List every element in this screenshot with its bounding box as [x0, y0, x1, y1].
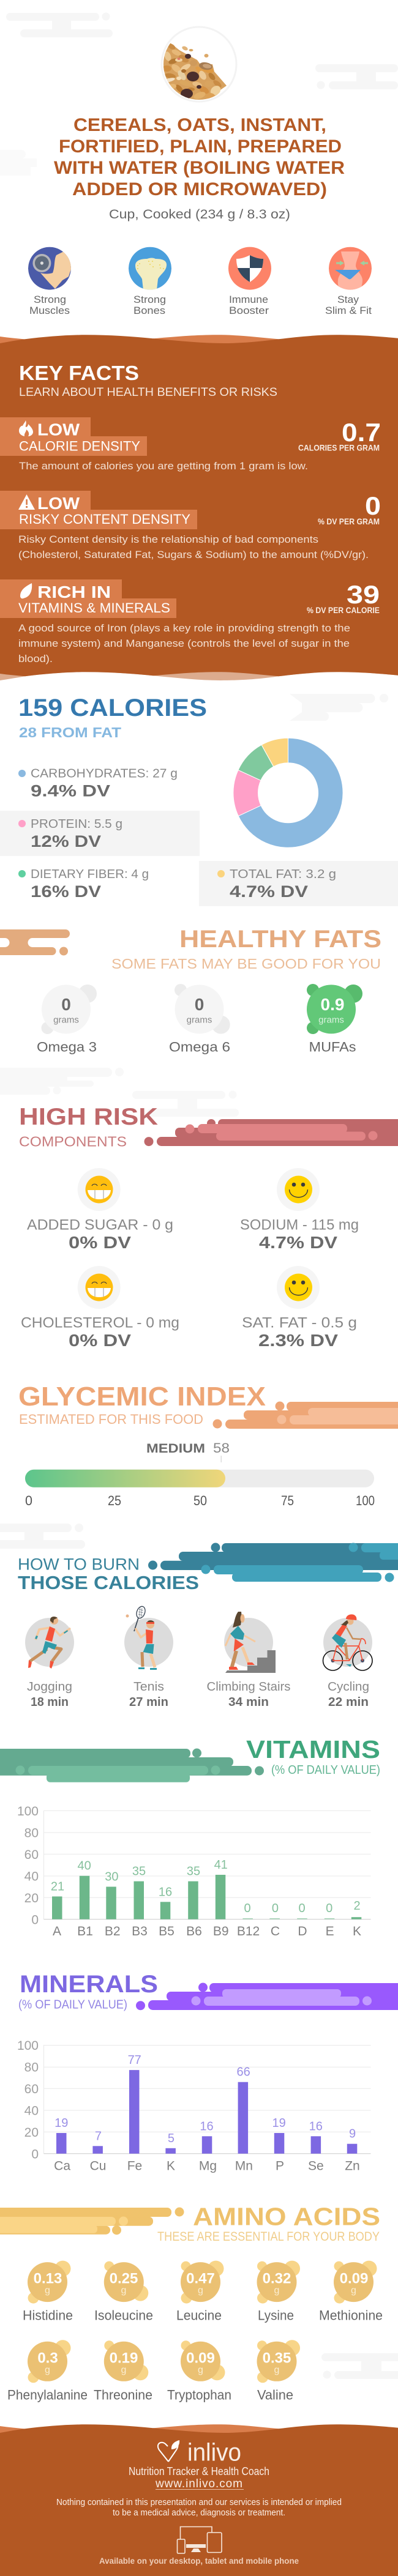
amino: isoleucine: Isoleucine	[94, 2308, 153, 2323]
title: ADDED OR MICROWAVED)	[72, 179, 327, 199]
label: jogging: Jogging	[27, 1680, 72, 1694]
title: WITH WATER (BOILING WATER	[54, 158, 345, 178]
bar chart: vitamins: D	[298, 1924, 307, 1938]
decoration: mineral bars	[136, 1982, 398, 2010]
amino: tryptophan: g	[198, 2365, 203, 2375]
item: added sugar: 0% DV	[69, 1233, 131, 1252]
amino: histidine: g	[45, 2285, 50, 2296]
bar chart: vitamins: A	[53, 1924, 61, 1938]
label: tennis: 27 min	[129, 1696, 168, 1709]
label: strong muscles	[29, 294, 70, 316]
bar chart: vitamins: 0	[298, 1902, 306, 1915]
bar chart: minerals: Fe	[127, 2159, 142, 2173]
panel: glycemic index	[18, 1382, 398, 1508]
item: added sugar: ADDED SUGAR - 0 g	[27, 1216, 173, 1234]
fact: rich in vitamins and minerals: % DV PER CALORIE	[307, 605, 380, 615]
decoration: high risk bars	[145, 1119, 398, 1146]
bar chart: vitamins: 2	[353, 1899, 361, 1913]
bar chart: minerals: Mn	[235, 2159, 253, 2173]
logo: inlivo	[187, 2438, 241, 2466]
bar chart: minerals: 80	[24, 2061, 39, 2074]
amino: threonine: Threonine	[94, 2388, 152, 2403]
raisins	[181, 54, 201, 99]
label: tennis	[129, 1680, 168, 1709]
legend: carbohydrates: CARBOHYDRATES: 27 g	[31, 767, 178, 781]
disclaimer	[56, 2497, 342, 2518]
mufas	[307, 984, 362, 1055]
bar chart: vitamins: 0	[272, 1902, 279, 1915]
amino: histidine: Histidine	[23, 2308, 73, 2323]
item: saturated fat: SAT. FAT - 0.5 g	[242, 1314, 357, 1331]
amino: phenylalanine: 0.3	[37, 2350, 58, 2367]
gauge value	[146, 1440, 230, 1462]
donut chart	[233, 738, 343, 847]
legend: protein: PROTEIN: 5.5 g	[31, 817, 122, 831]
activity: climbing stairs	[224, 1612, 276, 1673]
decoration: glycemic bars	[213, 1401, 398, 1429]
legend: carbohydrates: 9.4% DV	[31, 782, 110, 800]
gauge bar	[25, 1470, 374, 1487]
heading: key facts: LEARN ABOUT HEALTH BENEFITS OR RISKS	[19, 386, 277, 399]
serving size: Cup, Cooked (234 g / 8.3 oz)	[109, 207, 290, 221]
bar chart: vitamins: B1	[77, 1924, 93, 1938]
bar chart: minerals: K	[167, 2159, 175, 2173]
label: cycling	[328, 1680, 369, 1709]
legend: dietary fiber	[18, 868, 149, 901]
omega 6: Omega 6	[169, 1040, 230, 1055]
label: jogging	[27, 1680, 72, 1709]
label: tennis: Tenis	[133, 1680, 164, 1694]
amino: leucine: 0.47	[186, 2271, 215, 2287]
amino: isoleucine	[94, 2261, 153, 2323]
amino: valine	[257, 2340, 300, 2403]
item: cholesterol	[21, 1266, 179, 1350]
bar chart: vitamins	[17, 1804, 371, 1938]
amino: tryptophan: Tryptophan	[167, 2388, 231, 2403]
omega 3	[37, 985, 97, 1055]
amino: methionine: Methionine	[319, 2308, 383, 2323]
label: stay slim and fit	[325, 294, 372, 316]
amino: leucine: g	[198, 2285, 203, 2296]
heading: high risk: COMPONENTS	[19, 1134, 127, 1150]
label: jogging: 18 min	[31, 1696, 69, 1709]
legend: dietary fiber: DIETARY FIBER: 4 g	[31, 868, 149, 881]
amino: valine: Valine	[257, 2388, 293, 2403]
bar chart: vitamins: 35	[187, 1865, 200, 1878]
heading: amino acids	[157, 2203, 380, 2244]
fact: rich in vitamins and minerals: 39	[347, 580, 380, 609]
bar chart: minerals: 77	[128, 2053, 141, 2067]
panel: vitamins	[0, 1735, 380, 1938]
heading: key facts: KEY FACTS	[19, 362, 139, 384]
bar chart: vitamins: 0	[326, 1902, 332, 1915]
label: climbing stairs: 34 min	[228, 1696, 269, 1709]
label: immune booster	[229, 294, 269, 316]
item: added sugar	[27, 1168, 173, 1252]
amino: lysine: g	[274, 2285, 279, 2296]
bar chart: minerals: Se	[308, 2159, 324, 2173]
bar chart: vitamins: 40	[24, 1870, 39, 1883]
mufas: 0.9	[321, 995, 344, 1014]
mufas: grams	[318, 1015, 344, 1026]
bar chart: vitamins: K	[353, 1924, 361, 1938]
label: immune booster: Booster	[229, 305, 269, 316]
label: strong bones: Bones	[133, 305, 165, 316]
amino: valine: 0.35	[263, 2350, 291, 2367]
amino: leucine	[176, 2261, 224, 2323]
heading: calories	[18, 694, 207, 740]
amino: histidine: 0.13	[34, 2271, 62, 2287]
fact: rich in vitamins and minerals: immune system) and Manganese (controls the level of sugar in the	[18, 638, 350, 649]
logo	[158, 2438, 241, 2466]
heading: healthy fats: HEALTHY FATS	[179, 926, 381, 953]
label: strong muscles: Muscles	[29, 305, 70, 316]
gauge value: MEDIUM	[146, 1441, 205, 1456]
panel: amino acids	[0, 2203, 383, 2403]
bar chart: minerals: 5	[168, 2132, 175, 2145]
item: cholesterol: CHOLESTEROL - 0 mg	[21, 1314, 179, 1331]
footer	[0, 2424, 398, 2576]
bar chart: vitamins: 16	[159, 1885, 172, 1899]
activity: jogging	[25, 1617, 74, 1669]
bar chart: vitamins: C	[271, 1924, 280, 1938]
bar chart: minerals: 16	[200, 2120, 214, 2133]
amino: tryptophan: 0.09	[186, 2350, 215, 2367]
fact: risky content density: % DV PER GRAM	[318, 516, 380, 526]
panel: burn calories	[18, 1543, 398, 1709]
fact: calorie density	[0, 417, 381, 472]
amino: lysine: Lysine	[258, 2308, 294, 2323]
fact: calorie density: The amount of calories you are getting from 1 gram is low.	[19, 460, 308, 472]
heading: glycemic index: GLYCEMIC INDEX	[18, 1382, 266, 1412]
amino: isoleucine: 0.25	[110, 2271, 138, 2287]
heading: glycemic index	[18, 1382, 266, 1427]
activity: cycling	[323, 1614, 372, 1670]
heading: glycemic index: ESTIMATED FOR THIS FOOD	[19, 1412, 203, 1427]
omega 3: Omega 3	[37, 1040, 97, 1055]
decoration: vitamin bars	[0, 1749, 264, 1782]
bar chart: minerals: 20	[24, 2126, 39, 2140]
heading: vitamins: (% OF DAILY VALUE)	[271, 1763, 380, 1777]
bar chart: vitamins: E	[326, 1924, 334, 1938]
bar chart: minerals: P	[276, 2159, 284, 2173]
legend: total fat	[217, 868, 336, 901]
legend: protein	[18, 817, 122, 851]
bar chart: minerals: 7	[95, 2129, 102, 2143]
mufas: MUFAs	[309, 1040, 356, 1055]
panel: minerals	[17, 1971, 398, 2173]
bar chart: vitamins: 30	[105, 1870, 119, 1883]
panel: high risk	[19, 1104, 398, 1350]
gauge scale: 50	[193, 1493, 207, 1508]
bar chart: vitamins: 60	[24, 1848, 39, 1862]
item: sodium: SODIUM - 115 mg	[240, 1216, 359, 1234]
item: cholesterol: 0% DV	[69, 1331, 131, 1350]
heading: key facts	[19, 362, 277, 399]
fact: calorie density: LOW	[37, 420, 80, 439]
heading: minerals	[18, 1971, 158, 2012]
omega 3: grams	[53, 1015, 79, 1026]
fact: risky content density: Risky Content density is the relationship of bad components	[18, 534, 318, 545]
amino: tryptophan	[167, 2340, 231, 2403]
label: climbing stairs: Climbing Stairs	[207, 1680, 290, 1694]
bar chart: vitamins: 41	[214, 1858, 228, 1872]
heading: calories: 159 CALORIES	[18, 694, 207, 721]
omega 6	[169, 984, 230, 1055]
panel: healthy fats	[0, 926, 381, 1055]
panel: calories	[0, 694, 398, 906]
heading: vitamins	[246, 1735, 380, 1777]
benefit icons	[28, 247, 372, 316]
heading: healthy fats: SOME FATS MAY BE GOOD FOR YOU	[111, 956, 381, 972]
bar chart: vitamins: 100	[17, 1804, 39, 1818]
legend: protein: 12% DV	[31, 832, 101, 851]
fact: rich in vitamins and minerals	[0, 579, 380, 664]
bar chart: minerals: 100	[17, 2039, 39, 2053]
icon: strong bones	[129, 247, 171, 290]
fact: calorie density: CALORIES PER GRAM	[298, 443, 380, 453]
heading: vitamins: VITAMINS	[246, 1735, 380, 1763]
title	[54, 115, 345, 199]
bar chart: minerals: Mg	[199, 2159, 217, 2173]
icon: flame	[19, 420, 33, 436]
bar chart: vitamins: 21	[51, 1880, 64, 1893]
bar chart: vitamins: 35	[132, 1865, 146, 1878]
icon: leaf	[20, 583, 32, 598]
heading: amino acids: AMINO ACIDS	[193, 2203, 380, 2231]
fact: risky content density: RISKY CONTENT DENSITY	[19, 512, 190, 527]
bar chart: vitamins: B6	[186, 1924, 202, 1938]
bar chart: vitamins: B3	[132, 1924, 148, 1938]
label: cycling: 22 min	[328, 1696, 369, 1709]
fact: rich in vitamins and minerals: A good source of Iron (plays a key role in providing strength to the	[18, 622, 350, 634]
omega 6: 0	[195, 995, 204, 1014]
omega 6: grams	[187, 1015, 212, 1026]
bar chart: vitamins: 0	[31, 1913, 39, 1927]
amino: methionine	[319, 2261, 383, 2323]
icon: strong muscles	[28, 247, 71, 290]
heading: high risk: HIGH RISK	[19, 1104, 158, 1130]
bar chart: minerals: 60	[24, 2082, 39, 2096]
bar chart: minerals: Ca	[54, 2159, 70, 2173]
label: cycling: Cycling	[328, 1680, 369, 1694]
fact: rich in vitamins and minerals: blood).	[18, 653, 53, 664]
decoration: amino bars	[0, 2208, 184, 2235]
heading: minerals: MINERALS	[20, 1971, 158, 1998]
legend: total fat: 4.7% DV	[230, 882, 308, 901]
gauge scale: 75	[281, 1493, 294, 1508]
amino: phenylalanine: g	[45, 2365, 50, 2375]
bar chart: vitamins: 80	[24, 1826, 39, 1841]
fact: rich in vitamins and minerals: RICH IN	[37, 583, 111, 601]
gauge scale: 100	[356, 1493, 375, 1508]
amino: threonine	[94, 2340, 152, 2403]
amino: methionine: g	[351, 2285, 356, 2296]
bar chart: vitamins: B12	[237, 1924, 260, 1938]
title: FORTIFIED, PLAIN, PREPARED	[59, 136, 342, 157]
label: stay slim and fit: Slim & Fit	[325, 305, 372, 316]
bar chart: minerals: Zn	[345, 2159, 360, 2173]
bar chart: minerals: Cu	[90, 2159, 106, 2173]
amino: methionine: 0.09	[340, 2271, 368, 2287]
icon: stay slim and fit	[329, 247, 372, 291]
decoration: burn bars	[148, 1543, 398, 1582]
amino: phenylalanine	[7, 2340, 88, 2403]
icon: devices	[178, 2527, 222, 2553]
bar chart: minerals: 0	[31, 2148, 39, 2161]
gauge scale	[25, 1493, 375, 1508]
bar chart: minerals: 16	[309, 2120, 323, 2133]
tagline: Nutrition Tracker & Health Coach	[129, 2465, 269, 2477]
label: climbing stairs	[207, 1680, 290, 1709]
amino: phenylalanine: Phenylalanine	[7, 2388, 88, 2403]
decoration: healthy fats bars	[0, 929, 70, 956]
fact: risky content density: LOW	[37, 494, 80, 513]
activity: tennis	[124, 1605, 173, 1670]
amino: lysine	[257, 2261, 300, 2323]
item: saturated fat	[242, 1266, 357, 1350]
amino: threonine: 0.19	[110, 2350, 138, 2367]
heading: how to burn: THOSE CALORIES	[18, 1572, 199, 1593]
legend: carbohydrates	[18, 767, 178, 800]
amino: lysine: 0.32	[263, 2271, 291, 2287]
gauge scale: 25	[108, 1493, 121, 1508]
fact: risky content density: (Cholesterol, Saturated Fat, Sugars & Sodium) to the amount (%DV/gr).	[18, 549, 369, 560]
availability note: Available on your desktop, tablet and mobile phone	[99, 2556, 299, 2566]
icon: warning triangle	[18, 494, 35, 510]
label: strong bones	[133, 294, 166, 316]
bar chart: minerals: 19	[54, 2116, 68, 2130]
heading: calories: 28 FROM FAT	[19, 724, 121, 740]
fact: calorie density: 0.7	[342, 418, 381, 447]
heading: high risk	[19, 1104, 158, 1150]
disclaimer: Nothing contained in this presentation and our services is intended or implied	[56, 2497, 342, 2507]
label: immune booster: Immune	[229, 294, 268, 305]
heading: minerals: (% OF DAILY VALUE)	[18, 1998, 127, 2012]
disclaimer: to be a medical advice, diagnosis or treatment.	[113, 2507, 285, 2518]
fact: rich in vitamins and minerals: VITAMINS & MINERALS	[18, 600, 170, 616]
label: strong bones: Strong	[133, 294, 166, 305]
bar chart: vitamins: 40	[77, 1859, 91, 1873]
heading: how to burn	[18, 1555, 199, 1593]
legend: total fat: TOTAL FAT: 3.2 g	[230, 868, 336, 881]
omega 3: 0	[61, 995, 71, 1014]
label: strong muscles: Strong	[34, 294, 66, 305]
title: CEREALS, OATS, INSTANT,	[73, 115, 326, 135]
amino: leucine: Leucine	[176, 2308, 222, 2323]
bar chart: vitamins: B5	[159, 1924, 175, 1938]
heading: how to burn: HOW TO BURN	[18, 1555, 140, 1574]
fact: calorie density: CALORIE DENSITY	[19, 439, 140, 454]
item: saturated fat: 2.3% DV	[258, 1331, 338, 1350]
bar chart: vitamins: 0	[244, 1902, 251, 1915]
gauge scale: 0	[25, 1493, 32, 1508]
amino: histidine	[23, 2261, 73, 2323]
website: www.inlivo.com	[155, 2477, 242, 2490]
bar chart: minerals: 66	[236, 2066, 250, 2079]
panel: key facts	[0, 335, 398, 680]
item: sodium	[240, 1168, 359, 1252]
bar chart: vitamins: B2	[105, 1924, 121, 1938]
bar chart: minerals: 40	[24, 2104, 39, 2118]
food image	[160, 27, 236, 103]
amino: valine: g	[274, 2365, 279, 2375]
icon: immune booster	[228, 247, 271, 290]
heading: healthy fats	[111, 926, 381, 972]
fact: risky content density	[0, 491, 381, 560]
bar chart: vitamins: 20	[24, 1891, 39, 1905]
amino: isoleucine: g	[121, 2285, 126, 2296]
item: sodium: 4.7% DV	[259, 1233, 337, 1252]
bar chart: vitamins: B9	[213, 1924, 229, 1938]
fact: risky content density: 0	[365, 491, 381, 520]
amino: threonine: g	[121, 2365, 126, 2375]
bar chart: minerals	[17, 2039, 371, 2173]
bar chart: minerals: 19	[272, 2116, 286, 2130]
gauge value: 58	[213, 1440, 230, 1456]
label: stay slim and fit: Stay	[337, 294, 359, 305]
legend: dietary fiber: 16% DV	[31, 882, 101, 901]
bar chart: minerals: 9	[349, 2127, 356, 2141]
